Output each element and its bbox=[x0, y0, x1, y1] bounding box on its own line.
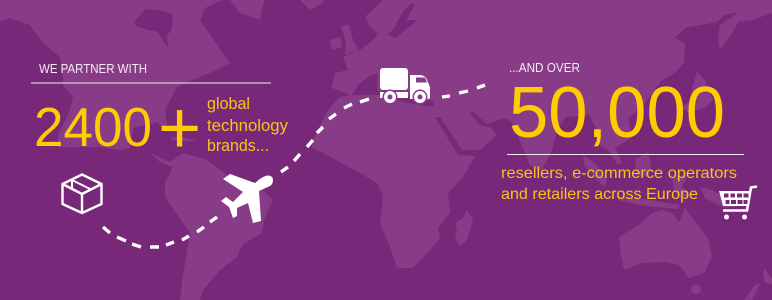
divider right bbox=[507, 154, 744, 155]
Sumatra bbox=[583, 155, 607, 187]
Britain bbox=[341, 25, 359, 55]
text: global technology brands: global bbox=[207, 94, 250, 113]
text: resellers and retailers bbox=[501, 165, 737, 203]
Greenland bbox=[230, 0, 324, 20]
Madagascar bbox=[455, 210, 473, 246]
Sulawesi bbox=[672, 175, 690, 198]
number: 50,000: 50,000 bbox=[509, 73, 725, 153]
Borneo bbox=[635, 152, 651, 177]
dashed route: truck onward bbox=[442, 85, 485, 97]
icon: truck bbox=[380, 68, 430, 104]
Caribbean islands bbox=[170, 137, 197, 141]
Java bbox=[618, 196, 680, 209]
text: resellers and retailers: and retailers across Europe bbox=[501, 186, 698, 203]
Japan bbox=[680, 72, 713, 112]
dashed route: box to plane bbox=[103, 217, 217, 247]
New Guinea bbox=[700, 187, 740, 208]
New Zealand bbox=[744, 268, 772, 300]
heading: we partner with: WE PARTNER WITH bbox=[39, 62, 147, 76]
Mediterranean Sea bbox=[352, 73, 435, 107]
text: global technology brands: technology bbox=[207, 116, 288, 135]
Australia bbox=[619, 208, 712, 278]
plus sign: + bbox=[158, 86, 201, 169]
text: global technology brands: brands... bbox=[207, 136, 269, 155]
Tasmania bbox=[691, 284, 701, 294]
number: 2400: 2400 bbox=[34, 96, 152, 158]
icon: package box bbox=[62, 174, 102, 213]
Ireland bbox=[330, 37, 342, 50]
icon: airplane bbox=[221, 174, 273, 223]
Sri Lanka bbox=[533, 151, 541, 163]
heading: and over: ...AND OVER bbox=[509, 61, 580, 75]
dashed route: plane to truck bbox=[281, 99, 369, 172]
icon: shopping cart bbox=[719, 186, 757, 220]
North America bbox=[0, 0, 230, 150]
divider left bbox=[31, 82, 271, 84]
Hudson Bay bbox=[134, 9, 173, 47]
text: resellers and retailers: resellers, e-commerce operators bbox=[501, 165, 737, 182]
South America bbox=[150, 153, 273, 300]
Europe, Africa and Asia bbox=[312, 0, 772, 268]
text: global technology brands bbox=[207, 94, 288, 155]
